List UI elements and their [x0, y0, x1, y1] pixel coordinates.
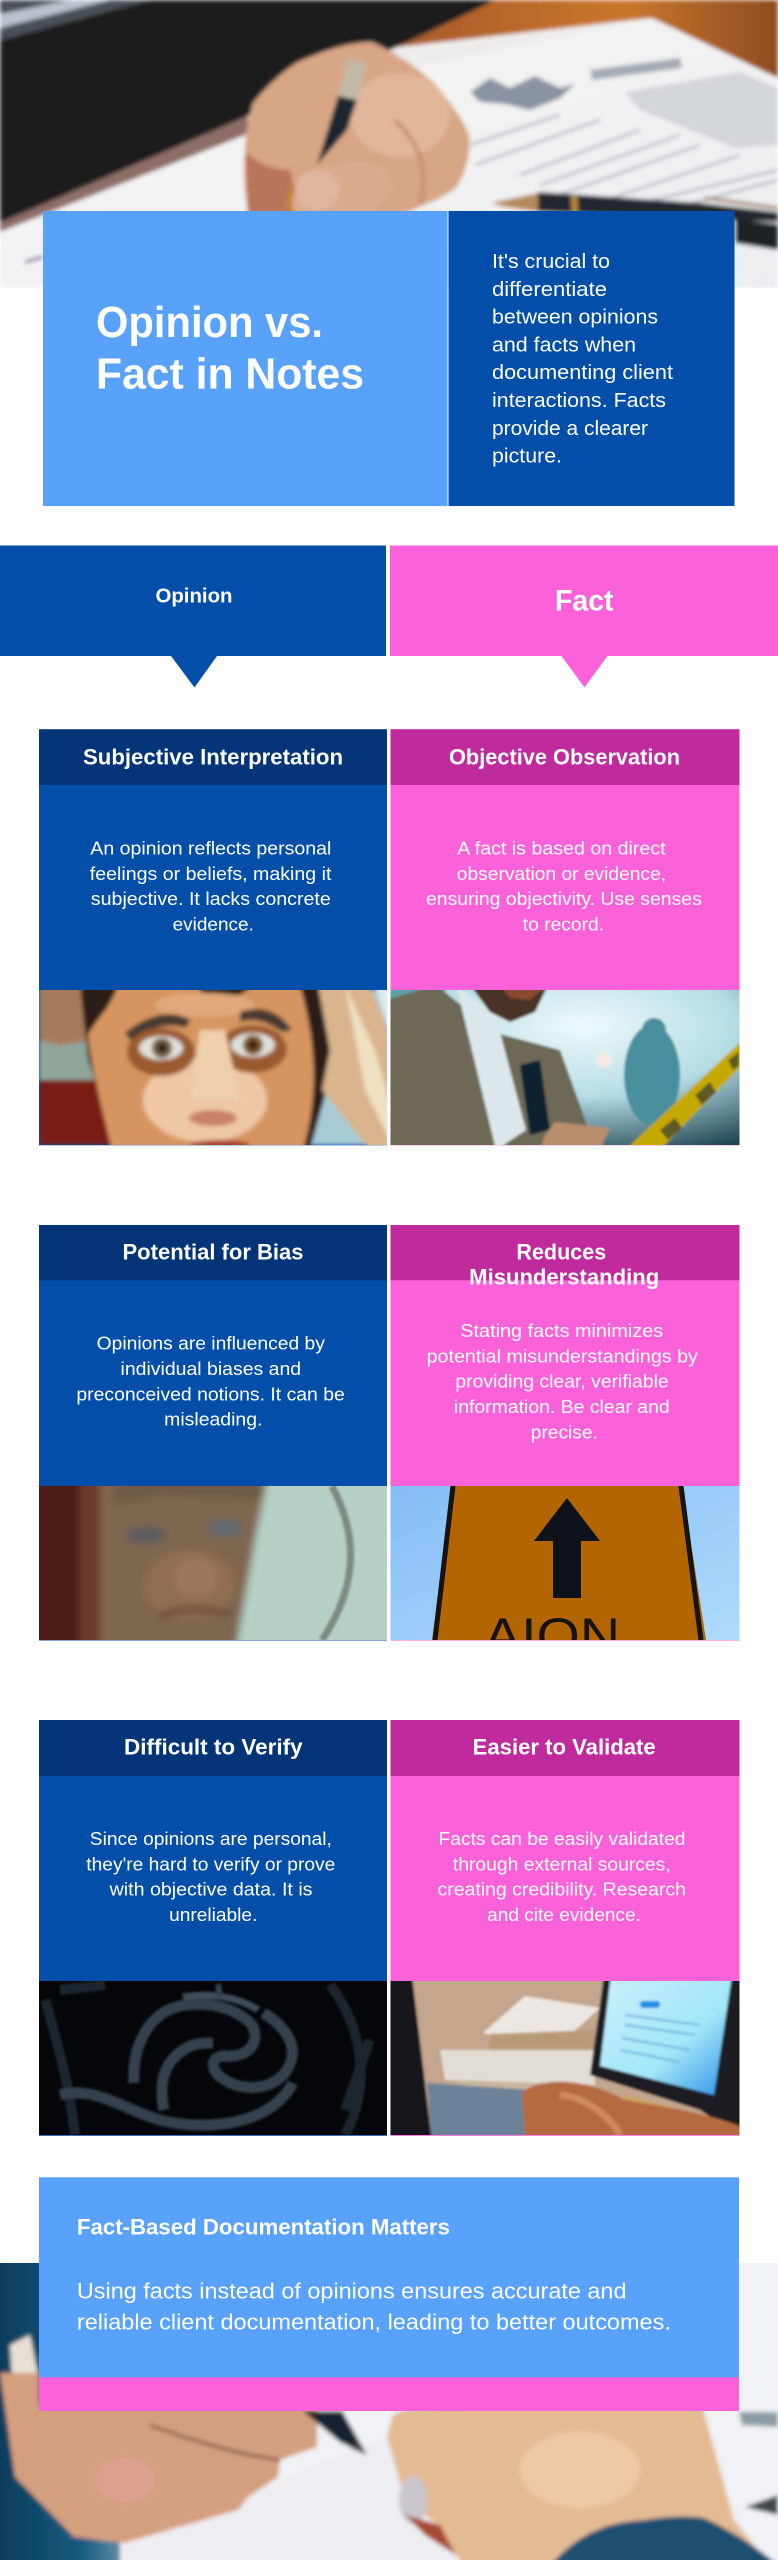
body text: Opinions are influenced by — [97, 1334, 325, 1354]
title: Opinion vs. — [96, 298, 323, 347]
photo: worried face — [39, 985, 392, 1150]
panel: Easier to Validate — [385, 1720, 745, 2140]
pen on desk — [491, 193, 540, 212]
panel: Objective Observation — [385, 729, 745, 1150]
heading: Subjective Interpretation — [83, 744, 343, 769]
body text: preconceived notions. It can be — [76, 1384, 345, 1404]
body text: evidence. — [173, 914, 254, 934]
photo: detective and crime scene tape — [385, 985, 745, 1150]
body text: ensuring objectivity. Use senses — [426, 889, 702, 909]
body text: they're hard to verify or prove — [86, 1854, 335, 1874]
body text: subjective. It lacks concrete — [91, 889, 331, 909]
pen barrel — [338, 58, 367, 100]
thumb — [290, 194, 304, 211]
body text: individual biases and — [120, 1359, 301, 1379]
heading — [39, 1225, 387, 1280]
intro panel — [448, 211, 734, 506]
body text: precise. — [531, 1422, 598, 1442]
heading: Reduces — [516, 1239, 606, 1264]
heading — [390, 1225, 740, 1290]
intro text: documenting client — [492, 362, 673, 384]
column header: Fact: Fact — [555, 585, 614, 618]
photo: road sign with arrow — [390, 1486, 740, 1640]
body text — [427, 1321, 698, 1442]
intro text: and facts when — [492, 334, 636, 356]
heading — [39, 1720, 387, 1776]
body text: Stating facts minimizes — [460, 1321, 663, 1341]
hero photo: hand writing in notebook — [0, 0, 778, 288]
body text — [76, 1334, 345, 1430]
intro text: interactions. Facts — [492, 390, 666, 412]
body text — [426, 838, 702, 934]
title — [96, 298, 364, 398]
body text: with objective data. It is — [109, 1880, 312, 1900]
column header: Opinion — [0, 546, 386, 688]
intro text — [492, 251, 673, 468]
photo: researcher typing at monitor — [385, 1975, 745, 2140]
body text: to record. — [523, 914, 604, 934]
conclusion heading: Fact-Based Documentation Matters — [77, 2215, 450, 2240]
body text — [86, 1829, 335, 1925]
photo: dark maze — [39, 1981, 387, 2135]
body text — [438, 1829, 686, 1925]
body text: A fact is based on direct — [457, 838, 666, 858]
photo: man looking in mirror — [39, 1486, 387, 1640]
body text: Facts can be easily validated — [438, 1829, 686, 1849]
conclusion text: reliable client documentation, leading to better outcomes. — [77, 2309, 671, 2334]
photo: road sign with arrow: AION — [484, 1608, 620, 1664]
panel: Potential for Bias — [30, 1225, 400, 1650]
column header: Fact — [390, 546, 778, 688]
body text — [90, 838, 331, 934]
conclusion text — [77, 2279, 671, 2334]
heading: Potential for Bias — [122, 1239, 304, 1264]
body text: providing clear, verifiable — [455, 1372, 669, 1392]
intro text: provide a clearer — [492, 418, 648, 440]
body text: and cite evidence. — [487, 1905, 641, 1925]
panel: Subjective Interpretation — [39, 729, 392, 1150]
title: Fact in Notes — [96, 350, 364, 398]
heading: Misunderstanding — [469, 1265, 659, 1290]
body text: unreliable. — [169, 1905, 257, 1925]
intro text: It's crucial to — [492, 251, 610, 273]
body text: information. Be clear and — [454, 1397, 670, 1417]
heading: Easier to Validate — [473, 1735, 656, 1760]
intro text: picture. — [492, 446, 562, 468]
heading — [390, 729, 740, 785]
footer photo: hands signing a document — [0, 2255, 778, 2560]
body text: through external sources, — [453, 1854, 671, 1874]
body text: misleading. — [164, 1410, 262, 1430]
pink accent bar — [39, 2377, 739, 2411]
body text: feelings or beliefs, making it — [90, 864, 331, 884]
column header: Opinion: Opinion — [156, 586, 232, 608]
heading — [390, 1720, 740, 1776]
hand holding pen — [244, 42, 469, 215]
conclusion text: Using facts instead of opinions ensures accurate and — [77, 2279, 627, 2304]
body text: An opinion reflects personal — [90, 838, 331, 858]
panel: Difficult to Verify — [39, 1720, 387, 2136]
body text: potential misunderstandings by — [427, 1346, 698, 1366]
body text: creating credibility. Research — [438, 1880, 686, 1900]
title panel — [43, 211, 448, 506]
panel: conclusion — [39, 2177, 739, 2411]
intro text: between opinions — [492, 307, 658, 329]
body text: observation or evidence, — [457, 864, 666, 884]
intro text: differentiate — [492, 279, 607, 301]
heading: Difficult to Verify — [124, 1735, 303, 1760]
body text: Since opinions are personal, — [90, 1829, 332, 1849]
heading: Objective Observation — [449, 744, 680, 769]
panel: Reduces Misunderstanding — [390, 1225, 740, 1664]
heading — [39, 729, 387, 785]
